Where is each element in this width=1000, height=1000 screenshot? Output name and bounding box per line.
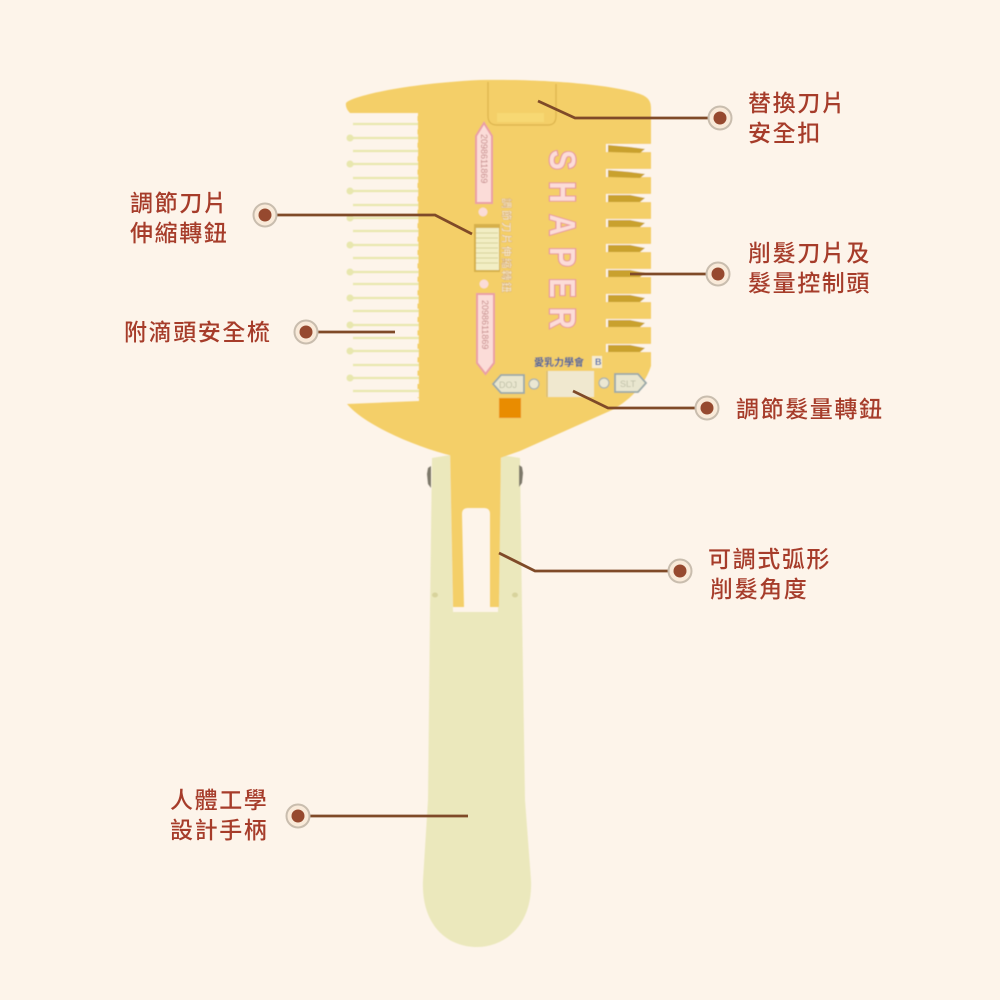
callout: blade safety latch: 安全扣	[748, 120, 822, 146]
brand label	[534, 356, 602, 369]
orange square	[499, 398, 521, 418]
pink scale tag bottom	[477, 280, 494, 374]
callout: ergonomic handle: 設計手柄	[170, 817, 268, 843]
blade length adjuster button	[474, 224, 500, 272]
callout: blade head: 削髮刀片及	[748, 240, 871, 266]
teeth of safety comb	[347, 124, 420, 391]
comb body	[346, 80, 651, 508]
callout: blade safety latch	[538, 90, 846, 146]
SHAPER wordmark: E	[542, 278, 583, 298]
blade replacement latch	[488, 82, 556, 125]
callout: ergonomic handle: 人體工學	[170, 787, 268, 813]
pink scale tag top: 2098611869	[479, 134, 489, 183]
right arrow tag: SLT	[620, 379, 636, 389]
blade teeth on right	[606, 144, 653, 352]
callout: safety comb: 附滴頭安全梳	[124, 319, 272, 345]
comb and handle product illustration	[346, 80, 653, 947]
SHAPER wordmark: R	[542, 307, 583, 329]
callout: blade head	[630, 240, 871, 296]
pink scale tag top	[476, 123, 492, 216]
ergonomic handle	[423, 455, 531, 947]
brand label: B	[595, 357, 602, 367]
callout: blade adjust dial: 調節刀片	[130, 190, 228, 216]
pink scale tag bottom: 2098611869	[480, 300, 490, 349]
forked stem	[450, 450, 501, 607]
callout: blade head: 髮量控制頭	[748, 270, 871, 296]
callout: blade adjust dial	[130, 190, 472, 246]
callout: volume dial	[573, 391, 884, 422]
callout: adjustable angle: 可調式弧形	[708, 546, 831, 572]
hair volume dial	[546, 371, 594, 397]
left arrow tag	[493, 375, 539, 393]
SHAPER wordmark: A	[542, 214, 583, 236]
callout: volume dial: 調節髮量轉鈕	[736, 396, 884, 422]
right arrow tag	[599, 374, 646, 392]
callout: blade adjust dial: 伸縮轉鈕	[130, 220, 228, 246]
base of comb teeth	[418, 116, 422, 398]
SHAPER wordmark: P	[542, 247, 583, 267]
SHAPER wordmark	[542, 150, 583, 329]
SHAPER wordmark: S	[542, 150, 583, 170]
left arrow tag: DOJ	[499, 380, 517, 390]
brand label: 愛乳力學會	[534, 356, 584, 369]
SHAPER wordmark: H	[542, 181, 583, 203]
vertical small text: 調節刀片伸縮轉鈕	[500, 198, 513, 294]
callout: adjustable angle: 削髮角度	[710, 576, 808, 602]
callout: safety comb	[124, 319, 395, 345]
callout: ergonomic handle	[170, 787, 468, 843]
callout: blade safety latch: 替換刀片	[748, 90, 846, 116]
callout: adjustable angle	[499, 546, 831, 602]
